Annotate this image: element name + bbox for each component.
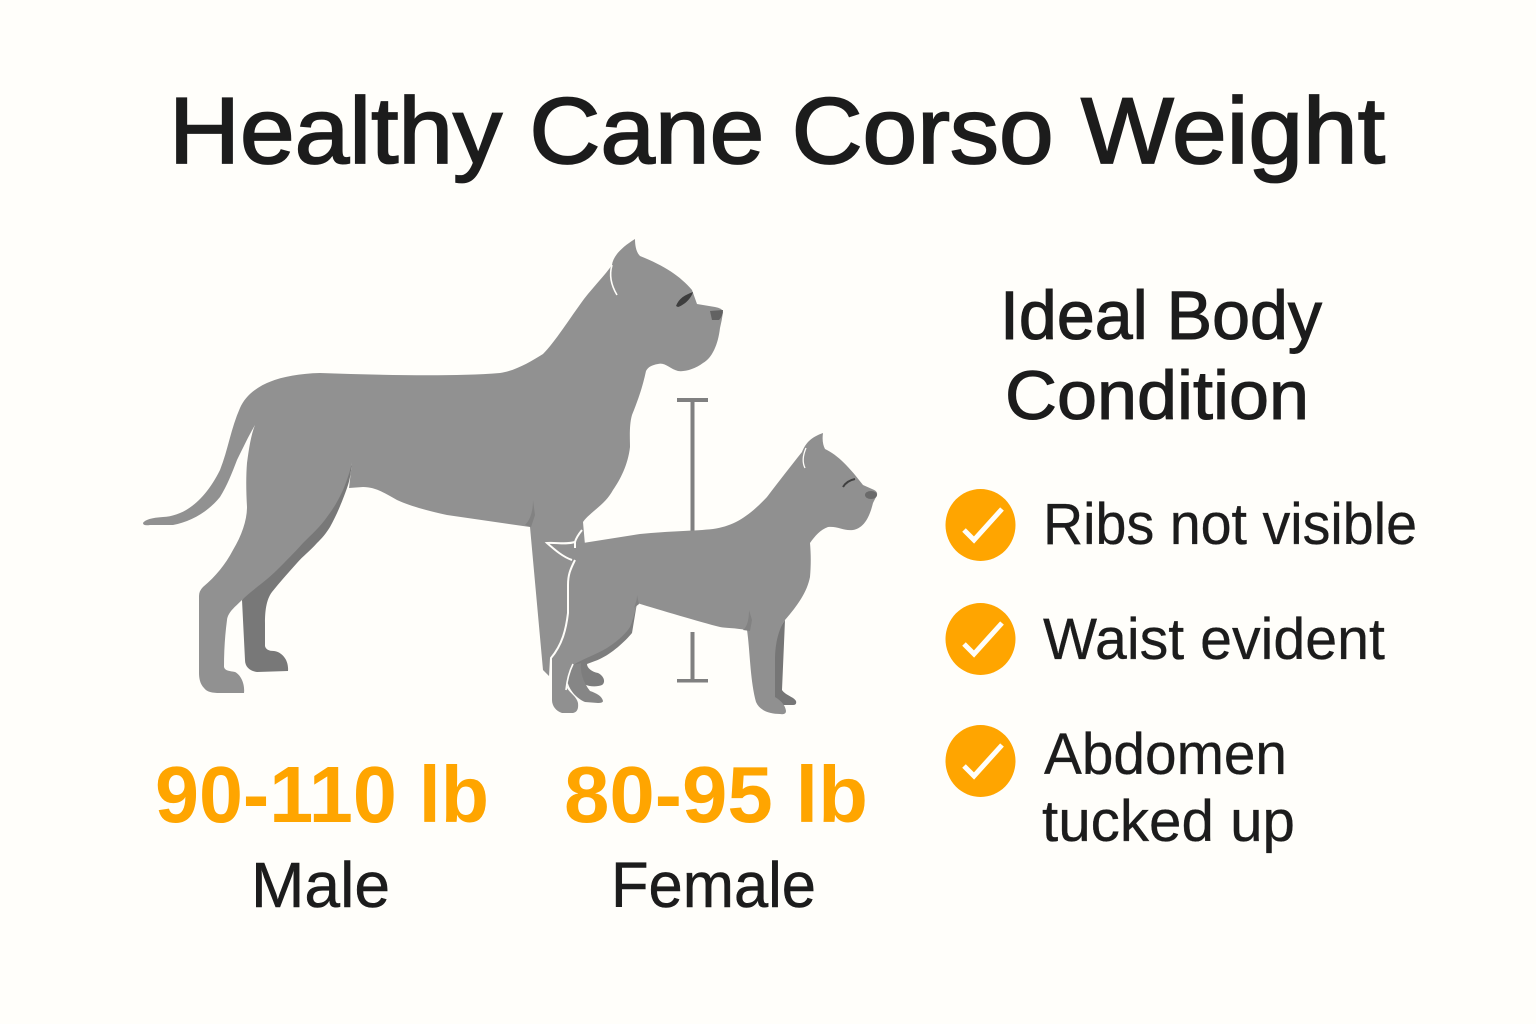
female dog silhouette xyxy=(547,433,877,714)
height measure bar xyxy=(677,398,708,682)
illustration: male and female dogs xyxy=(143,239,877,714)
white outline at overlap xyxy=(547,530,582,677)
far legs xyxy=(570,603,637,686)
male label: Male xyxy=(251,849,390,921)
checklist item: ribs not visible: Ribs not visible xyxy=(1043,492,1417,557)
body xyxy=(547,433,877,714)
icon: check xyxy=(946,725,1016,797)
icon: check xyxy=(946,603,1016,675)
nose xyxy=(865,491,877,499)
female label: Female xyxy=(611,849,816,921)
male weight: 90-110 lb xyxy=(155,750,489,839)
male dog silhouette xyxy=(143,239,723,693)
checklist item: abdomen tucked up: Abdomen xyxy=(1044,722,1287,787)
heading: ideal body condition xyxy=(1000,277,1322,434)
title: Healthy Cane Corso Weight xyxy=(169,78,1385,183)
checklist item: abdomen tucked up: tucked up xyxy=(1042,789,1295,854)
belly shadow xyxy=(634,595,639,608)
ear highlight xyxy=(803,448,806,468)
female weight: 80-95 lb xyxy=(564,750,868,839)
chest shadow xyxy=(743,610,752,631)
icon: check xyxy=(946,489,1016,561)
checklist item: abdomen tucked up xyxy=(946,722,1295,854)
heading: ideal body condition: Ideal Body xyxy=(1000,277,1322,354)
eye xyxy=(843,479,855,487)
checklist item: waist evident: Waist evident xyxy=(1043,607,1385,672)
eye xyxy=(676,292,693,307)
hind leg gap line xyxy=(566,664,573,690)
checklist item: waist evident xyxy=(946,603,1385,675)
heading: ideal body condition: Condition xyxy=(1005,357,1309,434)
chest shadow xyxy=(525,500,535,527)
nose xyxy=(710,310,723,320)
checklist item: ribs not visible xyxy=(946,489,1417,561)
ear highlight xyxy=(611,265,617,295)
